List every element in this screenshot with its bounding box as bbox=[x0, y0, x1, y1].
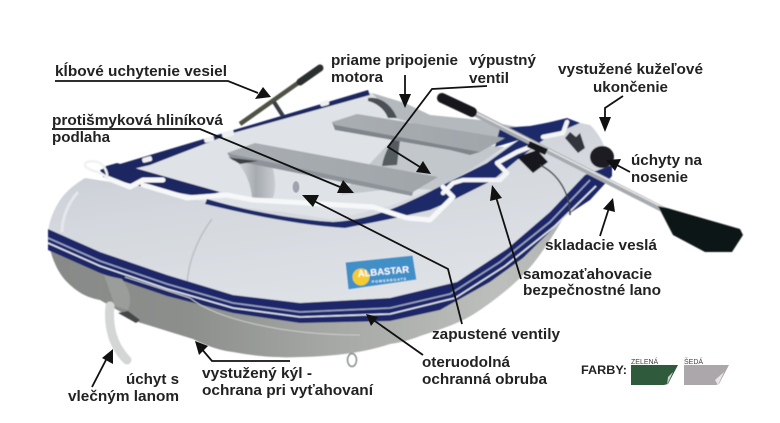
dark arch support bbox=[382, 140, 400, 166]
callout: protišmyková hliníková podlaha: podlaha bbox=[52, 130, 111, 146]
oar strap bbox=[540, 165, 570, 215]
callout: vystužený kýl: ochrana pri vyťahovaní bbox=[202, 383, 374, 399]
carry handle bbox=[590, 146, 614, 168]
stripe band bbox=[48, 165, 612, 323]
swatch: green: ZELENÁ bbox=[631, 357, 659, 366]
callout: oteruodolná ochranná obruba: ochranná obruba bbox=[422, 372, 548, 388]
swatch: green bbox=[631, 357, 678, 385]
callout: vystužené kužeľové ukončenie: ukončenie bbox=[593, 80, 668, 96]
tow bracket base bbox=[118, 311, 140, 323]
callout: úchyty na nosenie bbox=[606, 153, 703, 186]
callout: kĺbové uchytenie vesiel: kĺbové uchytenie vesiel bbox=[55, 62, 227, 80]
rear seat edge bbox=[332, 122, 480, 155]
boat keel bbox=[48, 168, 612, 357]
callout: samozaťahovacie bezpečnostné lano: samozaťahovacie bbox=[523, 267, 652, 283]
d ring bbox=[348, 354, 356, 366]
callout: zapustené ventily bbox=[302, 195, 560, 343]
tube seam bbox=[187, 219, 212, 284]
callout: výpustný ventil: ventil bbox=[469, 71, 509, 87]
tow bracket bbox=[104, 275, 130, 310]
near rope bbox=[107, 178, 453, 220]
callout: priame pripojenie motora: motora bbox=[331, 70, 384, 86]
logo: ALBASTAR bbox=[357, 265, 410, 280]
near navy gunwale bbox=[205, 118, 580, 228]
floor valve bbox=[292, 180, 300, 194]
left oar bbox=[240, 68, 320, 124]
callout: skladacie veslá bbox=[545, 198, 658, 254]
rope loop bbox=[85, 161, 107, 178]
callout: vystužené kužeľové ukončenie bbox=[558, 62, 703, 132]
white stripe low bbox=[48, 186, 596, 317]
oarlock clamp bbox=[527, 141, 548, 155]
callout: skladacie veslá: skladacie veslá bbox=[545, 238, 658, 254]
seat shadow bbox=[228, 157, 258, 164]
swatch: grey bbox=[684, 357, 729, 385]
front arch support bbox=[237, 162, 275, 198]
callout: úchyt s vlečným lanom: úchyt s bbox=[126, 372, 179, 388]
floor panels bbox=[340, 140, 505, 195]
callout: vystužený kýl bbox=[195, 341, 374, 399]
callout: úchyty na nosenie: nosenie bbox=[631, 170, 688, 186]
rear rope bbox=[443, 122, 567, 193]
callout: samozaťahovacie bezpečnostné lano bbox=[490, 185, 661, 299]
callout: úchyt s vlečným lanom: vlečným lanom bbox=[68, 389, 179, 405]
callout: protišmyková hliníková podlaha: protišmyková hliníková bbox=[52, 113, 224, 129]
callout: priame pripojenie motora bbox=[331, 53, 458, 108]
boat main tube bbox=[48, 120, 612, 306]
callout: vystužené kužeľové ukončenie: vystužené kužeľové bbox=[558, 62, 703, 78]
rear arch bbox=[368, 98, 397, 118]
tube highlight bbox=[62, 192, 78, 232]
far tube inner wall bbox=[372, 93, 523, 145]
front seat bbox=[227, 143, 438, 192]
oar lock bbox=[274, 102, 283, 116]
keel seams bbox=[125, 277, 360, 335]
logo: POWERBOATS bbox=[372, 277, 407, 284]
callout: priame pripojenie motora: priame pripojenie bbox=[331, 53, 458, 69]
rowlock bbox=[517, 150, 548, 173]
callout: protišmyková hliníková podlaha bbox=[52, 113, 354, 193]
boat illustration bbox=[48, 68, 743, 366]
callout: výpustný ventil bbox=[388, 53, 536, 174]
logo bbox=[345, 255, 417, 290]
callout: kĺbové uchytenie vesiel bbox=[55, 62, 271, 99]
callouts bbox=[52, 53, 703, 405]
front seat edge bbox=[227, 153, 413, 196]
callout: výpustný ventil: výpustný bbox=[469, 53, 536, 69]
white stripes bbox=[48, 180, 590, 312]
callout: zapustené ventily: zapustené ventily bbox=[432, 327, 560, 343]
rear seat bbox=[332, 114, 505, 152]
far navy gunwale bbox=[100, 90, 370, 176]
legend label: FARBY: bbox=[581, 363, 627, 377]
callout: oteruodolná ochranná obruba: oteruodolná bbox=[422, 355, 511, 371]
gunwale loops bbox=[142, 100, 330, 163]
tow rope bbox=[110, 306, 127, 360]
right oar bbox=[442, 98, 743, 252]
callout: samozaťahovacie bezpečnostné lano: bezpečnostné lano bbox=[523, 283, 661, 299]
boat floor bbox=[103, 92, 523, 220]
far right tube navy bbox=[495, 119, 567, 147]
swatch: grey: ŠEDÁ bbox=[684, 357, 703, 366]
callout: úchyty na nosenie: úchyty na bbox=[631, 153, 703, 169]
left navy patch bbox=[103, 163, 220, 197]
callout: vystužený kýl: vystužený kýl - bbox=[202, 366, 312, 382]
callout: oteruodolná ochranná obruba bbox=[366, 314, 548, 388]
color legend bbox=[581, 357, 729, 385]
callout: úchyt s vlečným lanom bbox=[68, 349, 179, 405]
bracket bbox=[565, 132, 585, 153]
